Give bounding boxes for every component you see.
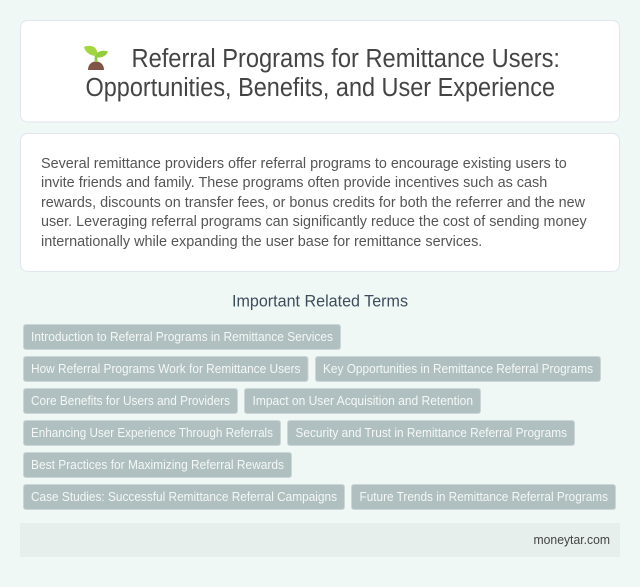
title: Referral Programs for Remittance Users: [132, 45, 560, 73]
tag: future trends: Future Trends in Remittance Referral Programs [360, 489, 608, 504]
tag: introduction: Introduction to Referral Programs in Remittance Services [31, 329, 333, 344]
tag: security and trust: Security and Trust in Remittance Referral Programs [296, 425, 567, 440]
text block: summary: rewards, discounts on transfer fees, or bonus credits for both the referrer and the new [41, 194, 585, 211]
tag: enhancing experience: Enhancing User Experience Through Referrals [31, 425, 273, 440]
tag: impact on acquisition: Impact on User Acquisition and Retention [252, 393, 473, 408]
panel: title card [20, 20, 620, 122]
tag: key opportunities: Key Opportunities in Remittance Referral Programs [323, 361, 593, 376]
title: Opportunities, Benefits, and User Experience [86, 74, 555, 102]
tag: introduction [24, 324, 340, 350]
text block: summary: invite friends and family. These programs often provide incentives such as cash [41, 174, 547, 191]
panel: summary card [20, 134, 620, 272]
tag list: related terms [24, 324, 616, 510]
text block: summary: user. Leveraging referral programs can significantly reduce the cost of sending money [41, 213, 587, 230]
tag: how programs work [24, 356, 308, 382]
icon: sprout [84, 46, 108, 70]
footer [20, 523, 620, 557]
tag: best practices: Best Practices for Maximizing Referral Rewards [31, 457, 284, 472]
tag: how programs work: How Referral Programs Work for Remittance Users [31, 361, 301, 376]
text block: summary: Several remittance providers offer referral programs to encourage existing users to [41, 155, 567, 172]
heading: related terms: Important Related Terms [232, 292, 408, 310]
tag: case studies: Case Studies: Successful Remittance Referral Campaigns [31, 489, 337, 504]
tag: case studies [24, 484, 344, 510]
tag: core benefits: Core Benefits for Users and Providers [31, 393, 230, 408]
tag: security and trust [288, 420, 574, 446]
tag: impact on acquisition [244, 388, 480, 414]
tag: future trends [352, 484, 616, 510]
title [86, 45, 560, 102]
text block: summary [41, 155, 587, 250]
text block: summary: internationally while expanding the user base for remittance services. [41, 233, 482, 250]
footer: moneytar.com [534, 532, 610, 547]
tag: core benefits [24, 388, 238, 414]
tag: best practices [24, 452, 292, 478]
tag: enhancing experience [24, 420, 280, 446]
tag: key opportunities [316, 356, 600, 382]
